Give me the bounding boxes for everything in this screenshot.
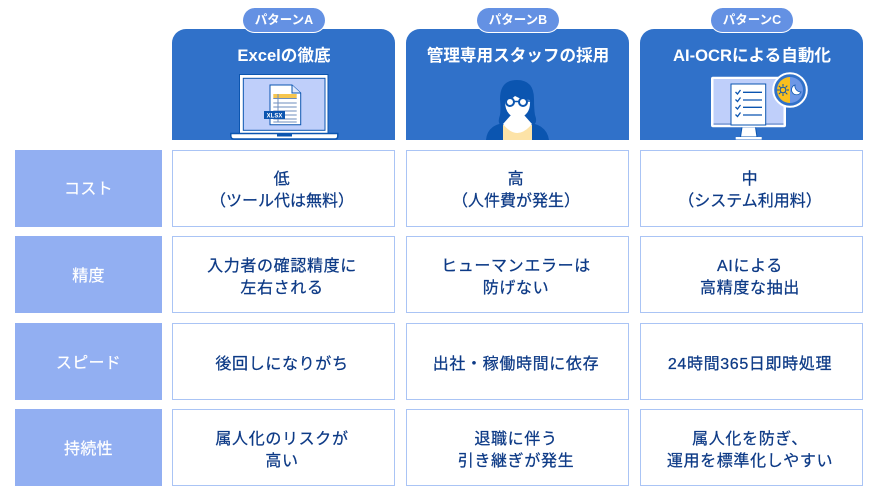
cell: sustainability B: 引き継ぎが発生 (458, 452, 574, 470)
cell: sustainability A: 属人化のリスクが (215, 430, 349, 448)
badge: pattern A (242, 8, 326, 33)
cell: speed A: 後回しになりがち (215, 356, 349, 372)
cell: speed A (172, 323, 395, 400)
cell: sustainability A (172, 409, 395, 486)
heading: pattern A: Excelの徹底 (237, 46, 331, 65)
cell: cost A: 低 (274, 170, 290, 188)
header: pattern A (172, 29, 395, 140)
cell: accuracy C (640, 236, 863, 313)
row label: accuracy: 精度 (72, 268, 105, 285)
row label: cost: コスト (64, 181, 113, 198)
cell: speed C: 24時間365日即時処理 (668, 356, 832, 372)
cell: sustainability A: 高い (265, 452, 299, 470)
header: pattern B (406, 29, 629, 140)
icon: monitor with checklist and day-night clock (711, 72, 808, 140)
row label: speed (15, 323, 162, 400)
cell: speed B: 出社・稼働時間に依存 (433, 356, 599, 372)
row label: accuracy (15, 236, 162, 313)
cell: sustainability C: 属人化を防ぎ、 (692, 430, 808, 448)
cell: accuracy A: 入力者の確認精度に (207, 258, 357, 274)
cell: accuracy A: 左右される (240, 280, 324, 296)
cell: sustainability B: 退職に伴う (474, 430, 558, 448)
cell: cost A: （ツール代は無料） (210, 192, 354, 210)
row label: cost (15, 150, 162, 227)
icon: person with glasses (486, 80, 549, 140)
cell: sustainability B (406, 409, 629, 486)
heading: pattern B: 管理専用スタッフの採用 (427, 46, 609, 65)
badge: pattern B: パターンB (489, 13, 547, 27)
cell: speed C (640, 323, 863, 400)
cell: sustainability C (640, 409, 863, 486)
cell: speed B (406, 323, 629, 400)
row: sustainability (15, 409, 863, 486)
badge: pattern A: パターンA (255, 13, 313, 27)
row: cost (15, 150, 863, 227)
cell: accuracy B (406, 236, 629, 313)
cell: accuracy B: 防げない (483, 280, 549, 296)
cell: accuracy C: AIによる (717, 258, 783, 274)
row: accuracy (15, 236, 863, 313)
cell: accuracy A (172, 236, 395, 313)
cell: accuracy B: ヒューマンエラーは (441, 258, 591, 274)
header: pattern C (640, 29, 863, 140)
badge: pattern C (710, 8, 794, 33)
cell: cost C: （システム利用料） (678, 192, 822, 210)
icon: laptop with xlsx file (230, 74, 338, 140)
cell: cost A (172, 150, 395, 227)
cell: sustainability C: 運用を標準化しやすい (667, 452, 833, 470)
cell: accuracy C: 高精度な抽出 (700, 280, 800, 296)
badge: pattern B (476, 8, 560, 33)
badge: pattern C: パターンC (723, 13, 781, 27)
heading: pattern C: AI-OCRによる自動化 (673, 46, 831, 65)
cell: cost B: 高 (508, 170, 524, 188)
row label: sustainability (15, 409, 162, 486)
cell: cost C (640, 150, 863, 227)
cell: cost B (406, 150, 629, 227)
icon: laptop with xlsx file: XLSX (267, 113, 282, 119)
cell: cost C: 中 (742, 170, 758, 188)
row label: speed: スピード (56, 355, 121, 372)
cell: cost B: （人件費が発生） (452, 192, 580, 210)
row: speed (15, 323, 863, 400)
row label: sustainability: 持続性 (64, 441, 113, 458)
